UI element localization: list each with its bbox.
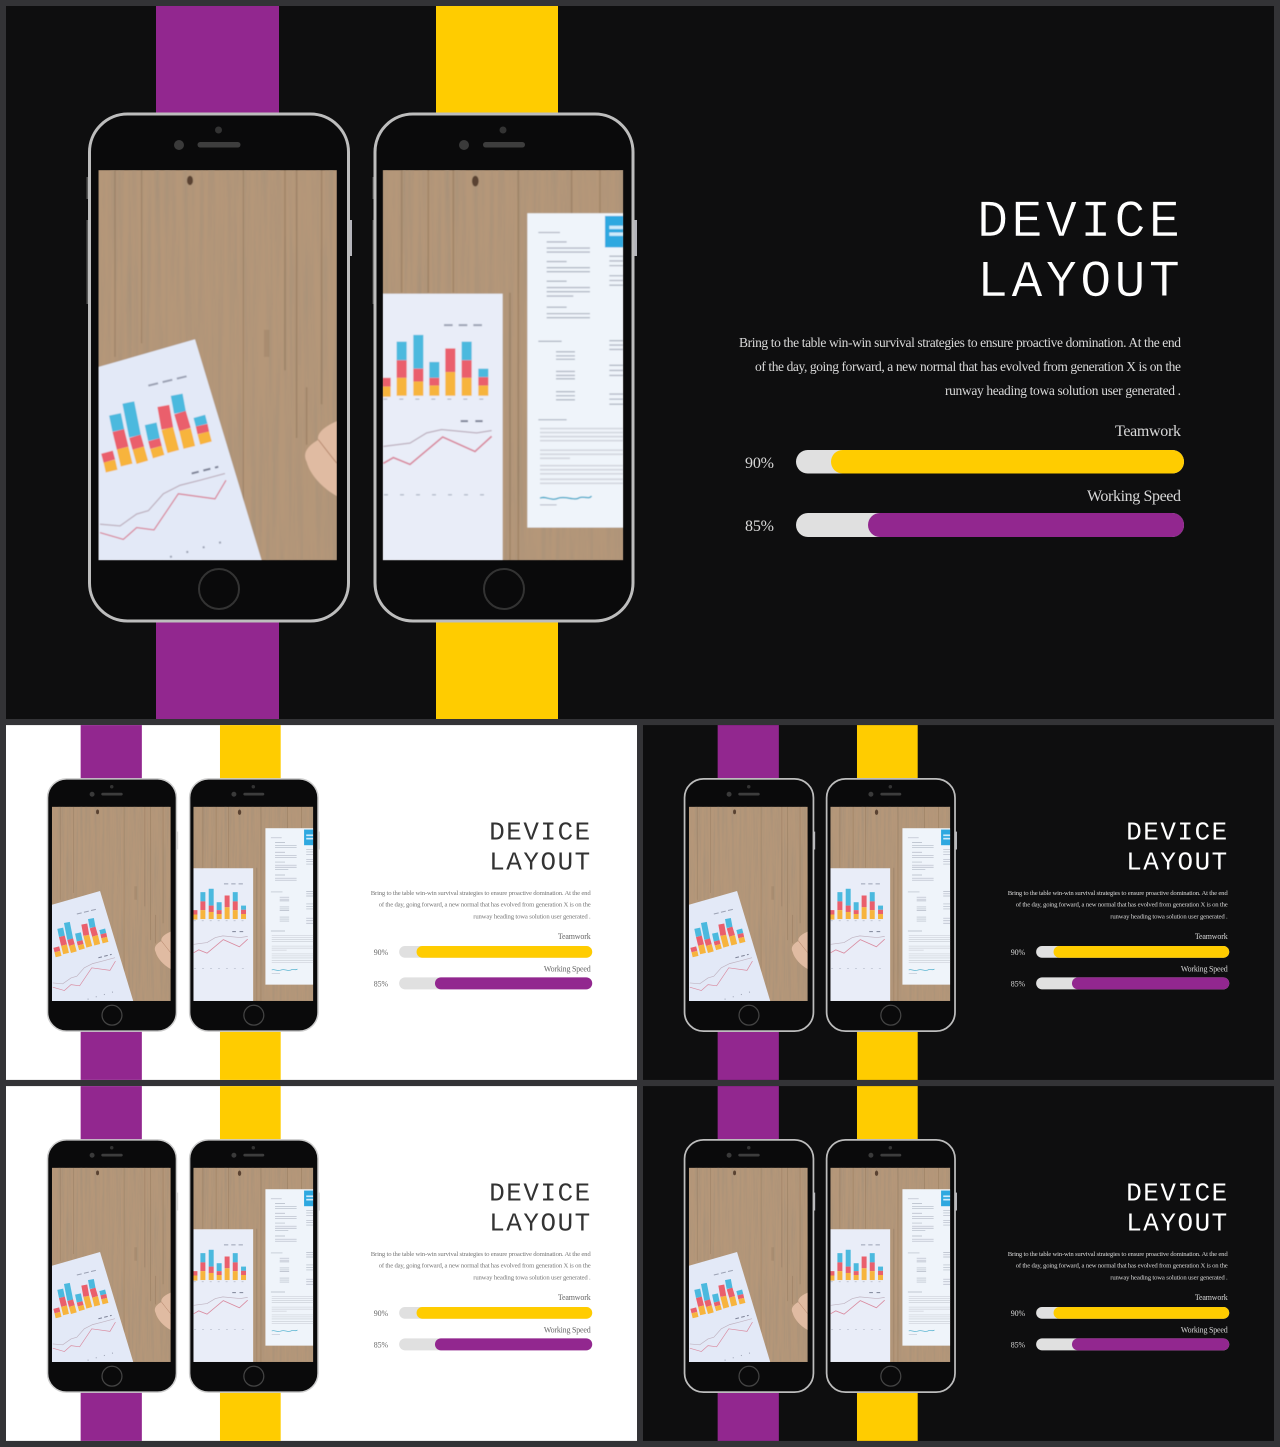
body text: Bring to the table win-win survival strategies to ensure proactive domination. At the end bbox=[1008, 890, 1228, 897]
progress: working speed bbox=[1011, 964, 1229, 989]
body text: Bring to the table win-win survival strategies to ensure proactive domination. At the end bbox=[371, 890, 591, 897]
progress: teamwork bbox=[1011, 1293, 1229, 1319]
body text: runway heading towa solution user generated . bbox=[473, 1275, 591, 1282]
phone: left mockup bbox=[86, 114, 352, 621]
title bbox=[489, 818, 590, 877]
phone: right mockup bbox=[827, 1140, 957, 1392]
yellow strip bbox=[857, 1086, 918, 1441]
body text bbox=[1008, 890, 1228, 921]
purple strip bbox=[81, 1086, 142, 1441]
slide: small dark variant top bbox=[643, 725, 1274, 1080]
phone: left mockup bbox=[685, 1140, 815, 1392]
title: LAYOUT bbox=[977, 253, 1180, 312]
yellow strip bbox=[220, 1086, 281, 1441]
progress: working speed: Working Speed bbox=[544, 1325, 591, 1334]
progress: working speed bbox=[374, 1325, 592, 1350]
body text: Bring to the table win-win survival strategies to ensure proactive domination. At the end bbox=[371, 1251, 591, 1258]
progress: working speed: 85% bbox=[374, 979, 389, 988]
purple strip bbox=[718, 1086, 779, 1441]
purple strip bbox=[156, 6, 279, 719]
progress: teamwork bbox=[374, 932, 592, 958]
progress: teamwork bbox=[1011, 932, 1229, 958]
yellow strip bbox=[857, 725, 918, 1080]
title: LAYOUT bbox=[1126, 1208, 1227, 1238]
progress: teamwork: 90% bbox=[374, 948, 389, 957]
title: LAYOUT bbox=[1126, 847, 1227, 877]
progress: working speed: Working Speed bbox=[1087, 488, 1181, 505]
progress: working speed: 85% bbox=[745, 518, 774, 535]
title: DEVICE bbox=[489, 818, 590, 848]
phone: left mockup bbox=[685, 779, 815, 1031]
yellow strip bbox=[220, 725, 281, 1080]
slide: large dark device layout bbox=[6, 6, 1274, 719]
progress: teamwork: Teamwork bbox=[558, 932, 591, 941]
title: LAYOUT bbox=[489, 847, 590, 877]
title bbox=[977, 193, 1180, 312]
body text: runway heading towa solution user generated . bbox=[1110, 1275, 1228, 1282]
yellow strip bbox=[436, 6, 558, 719]
progress: working speed: Working Speed bbox=[1181, 964, 1228, 973]
phone: left mockup bbox=[48, 779, 178, 1031]
body text: Bring to the table win-win survival strategies to ensure proactive domination. At the end bbox=[739, 335, 1181, 350]
phone: right mockup bbox=[827, 779, 957, 1031]
title: DEVICE bbox=[1126, 1179, 1227, 1209]
progress: working speed: Working Speed bbox=[544, 964, 591, 973]
body text: of the day, going forward, a new normal that has evolved from generation X is on the bbox=[1016, 902, 1228, 909]
body text bbox=[739, 335, 1181, 398]
progress: working speed bbox=[745, 488, 1184, 537]
body text: of the day, going forward, a new normal that has evolved from generation X is on the bbox=[379, 902, 591, 909]
body text: of the day, going forward, a new normal that has evolved from generation X is on the bbox=[379, 1263, 591, 1270]
progress: teamwork: Teamwork bbox=[1195, 1293, 1228, 1302]
progress: working speed: Working Speed bbox=[1181, 1325, 1228, 1334]
phone: right mockup bbox=[190, 779, 320, 1031]
slide: small white variant top bbox=[6, 725, 637, 1080]
progress: teamwork: 90% bbox=[374, 1309, 389, 1318]
progress: teamwork bbox=[374, 1293, 592, 1319]
title bbox=[489, 1179, 590, 1238]
title: DEVICE bbox=[977, 193, 1180, 252]
slide: small dark variant bottom bbox=[643, 1086, 1274, 1441]
progress: working speed bbox=[1011, 1325, 1229, 1350]
body text: of the day, going forward, a new normal that has evolved from generation X is on the bbox=[755, 359, 1181, 374]
title bbox=[1126, 1179, 1227, 1238]
progress: teamwork bbox=[745, 423, 1184, 474]
title: DEVICE bbox=[489, 1179, 590, 1209]
body text: runway heading towa solution user generated . bbox=[945, 383, 1181, 398]
progress: teamwork: Teamwork bbox=[1195, 932, 1228, 941]
title: DEVICE bbox=[1126, 818, 1227, 848]
body text: runway heading towa solution user generated . bbox=[473, 914, 591, 921]
body text bbox=[371, 890, 591, 921]
phone: right mockup bbox=[190, 1140, 320, 1392]
body text: Bring to the table win-win survival strategies to ensure proactive domination. At the end bbox=[1008, 1251, 1228, 1258]
phone: left mockup bbox=[48, 1140, 178, 1392]
body text: of the day, going forward, a new normal that has evolved from generation X is on the bbox=[1016, 1263, 1228, 1270]
progress: working speed: 85% bbox=[374, 1340, 389, 1349]
title bbox=[1126, 818, 1227, 877]
progress: working speed bbox=[374, 964, 592, 989]
progress: working speed: 85% bbox=[1011, 979, 1026, 988]
progress: teamwork: Teamwork bbox=[558, 1293, 591, 1302]
slide: small white variant bottom bbox=[6, 1086, 637, 1441]
progress: working speed: 85% bbox=[1011, 1340, 1026, 1349]
body text bbox=[371, 1251, 591, 1282]
progress: teamwork: 90% bbox=[745, 455, 774, 472]
title: LAYOUT bbox=[489, 1208, 590, 1238]
purple strip bbox=[81, 725, 142, 1080]
body text bbox=[1008, 1251, 1228, 1282]
body text: runway heading towa solution user generated . bbox=[1110, 914, 1228, 921]
progress: teamwork: Teamwork bbox=[1115, 423, 1181, 440]
progress: teamwork: 90% bbox=[1011, 948, 1026, 957]
purple strip bbox=[718, 725, 779, 1080]
progress: teamwork: 90% bbox=[1011, 1309, 1026, 1318]
phone: right mockup bbox=[372, 114, 637, 621]
